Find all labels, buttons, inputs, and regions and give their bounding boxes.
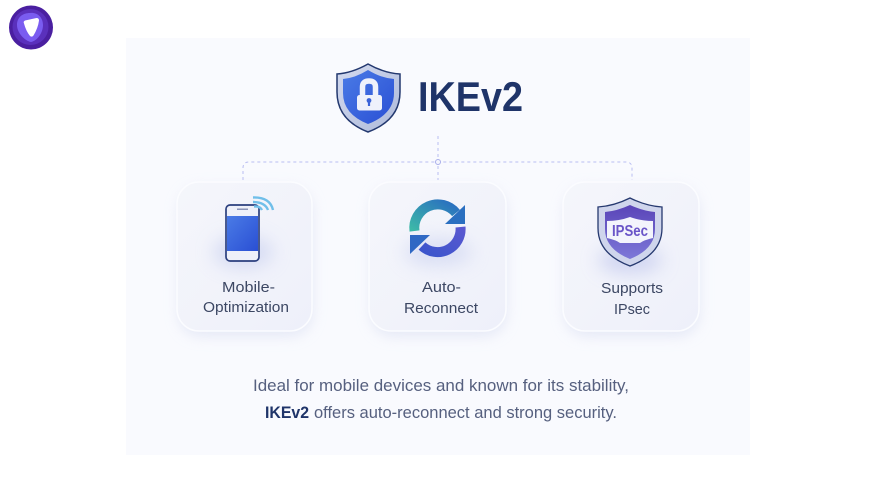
label: IPsec: [614, 301, 650, 318]
summary text: Ideal for mobile devices and known for its stability,: [253, 376, 629, 395]
card: mobile optimization: [177, 182, 312, 336]
dashed connectors: [243, 136, 632, 180]
title: IKEv2: [418, 73, 523, 120]
icon: IPSec shield: IPSec: [612, 223, 648, 240]
label: Auto-: [422, 279, 461, 296]
icon: sync arrows: [410, 204, 465, 254]
label: Reconnect: [404, 300, 479, 317]
summary text: [253, 376, 629, 422]
summary text: IKEv2: [265, 403, 309, 422]
label: Mobile-: [222, 279, 275, 296]
logo badge: [9, 6, 53, 50]
connector node: [436, 160, 440, 164]
icon: wifi signal: [253, 197, 273, 210]
label: Supports: [601, 280, 663, 297]
background panel: [126, 38, 750, 455]
header: shield icon and title: [337, 64, 523, 132]
label: [404, 279, 479, 317]
label: [203, 279, 289, 316]
icon: security shield with padlock: [337, 64, 400, 132]
card: auto-reconnect: [369, 182, 506, 336]
icon: phone: [226, 205, 259, 261]
card: supports IPsec: [563, 182, 699, 336]
label: [601, 280, 663, 318]
label: Optimization: [203, 299, 289, 316]
icon: IPSec shield: [598, 198, 662, 266]
summary text: offers auto-reconnect and strong security.: [314, 403, 617, 422]
